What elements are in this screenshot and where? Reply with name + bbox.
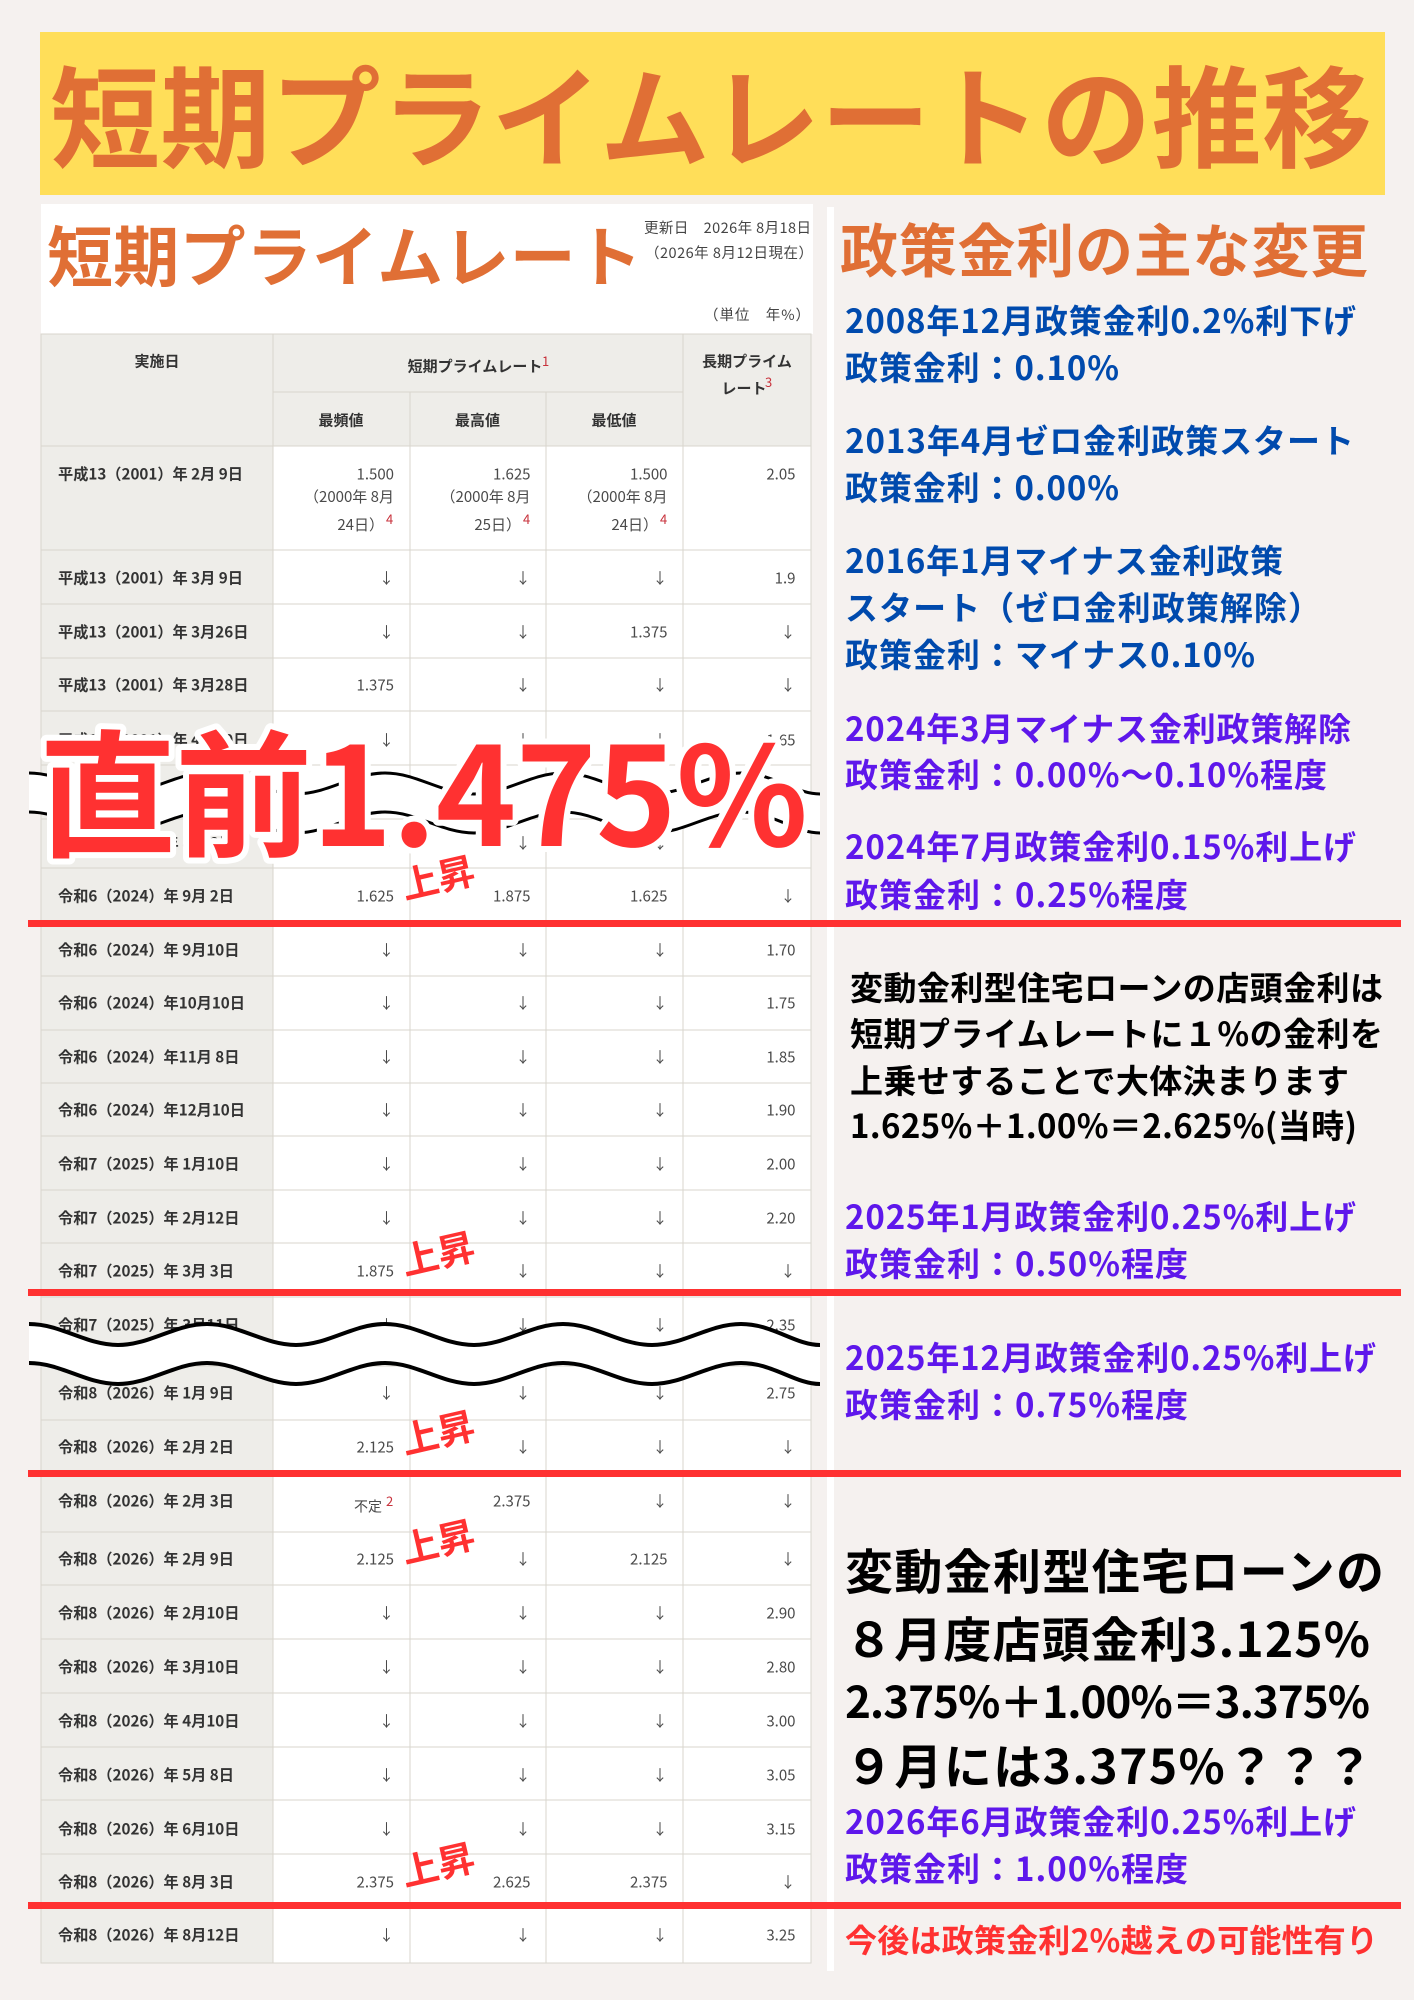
row 2026-03-10: ↓: [379, 1656, 394, 1678]
row 2025-01-10: ↓: [515, 1154, 530, 1174]
row 2026-08-03: 2.375: [357, 1872, 394, 1892]
outlook note: 今後は政策金利2%越えの可能性有り: [845, 1916, 1378, 1962]
highlight: August store rate: ９月には3.375%？？？: [845, 1728, 1373, 1798]
row 2025-03-03: ↓: [515, 1260, 530, 1282]
row 2025-01-10: ↓: [652, 1154, 668, 1174]
row 2026-02-09: 2.125: [357, 1548, 394, 1570]
policy change: 2026 June: 政策金利：1.00%程度: [845, 1843, 1188, 1891]
row 2026-04-10: ↓: [379, 1710, 394, 1732]
explanation: store rate rule: [850, 962, 1383, 1148]
row 2024-08: ↓: [515, 832, 530, 854]
row 2025-01-10: 令和7（2025）年 1月10日: [58, 1152, 239, 1174]
row 2025-02-12: 2.20: [766, 1208, 796, 1228]
row 2026-02-09: ↓: [780, 1548, 796, 1570]
policy change: 2026 June: 2026年6月政策金利0.25%利上げ: [845, 1796, 1356, 1844]
rise labels: 上昇: [395, 1396, 480, 1465]
row 2026-02-03: [58, 1490, 796, 1516]
row 2001-02-09: 2.05: [766, 464, 796, 484]
row 2026-02-10: [58, 1602, 796, 1624]
row 2026-02-03: 令和8（2026）年 2月 3日: [58, 1490, 234, 1512]
table header: 3: [765, 372, 772, 391]
row 2025-03-11: 令和7（2025）年 3月11日: [58, 1314, 239, 1336]
table header: 長期プライム: [702, 350, 792, 372]
policy change: 2016: 2016年1月マイナス金利政策: [845, 535, 1283, 583]
explanation: store rate rule: 上乗せすることで大体決まります: [850, 1055, 1349, 1103]
row 2026-01-09: ↓: [652, 1382, 668, 1404]
row 2026-01-09: 2.75: [766, 1382, 796, 1404]
row 2025-01-10: 2.00: [766, 1154, 796, 1174]
policy change: 2016: 政策金利：マイナス0.10%: [845, 629, 1255, 677]
row 2025-03-03: 令和7（2025）年 3月 3日: [58, 1260, 234, 1282]
row 2001-03-26: ↓: [379, 622, 394, 642]
row 2026-08-12: [58, 1924, 796, 1946]
row 2001-03-26: [58, 620, 796, 642]
policy change: 2024 March: [845, 703, 1351, 797]
row 2026-04-10: ↓: [515, 1710, 530, 1732]
row 2024-10-10: ↓: [652, 992, 668, 1014]
row 2001-04: [58, 728, 796, 750]
row 2026-03-10: ↓: [515, 1656, 530, 1678]
row 2024-11-08: ↓: [515, 1046, 530, 1068]
row 2024-12-10: ↓: [379, 1100, 394, 1120]
wave break: lower: [29, 1324, 820, 1384]
policy change: 2013: 2013年4月ゼロ金利政策スタート: [845, 415, 1354, 463]
row 2024-10-10: ↓: [379, 992, 394, 1014]
row 2026-06-10: ↓: [652, 1818, 668, 1840]
policy change: 2025 January: 政策金利：0.50%程度: [845, 1238, 1188, 1286]
policy change: 2013: 政策金利：0.00%: [845, 462, 1119, 510]
row 2026-05-08: ↓: [652, 1764, 668, 1786]
policy change: 2024 March: 政策金利：0.00%～0.10%程度: [845, 749, 1327, 797]
table background: [41, 334, 811, 1963]
row 2026-02-03: ↓: [652, 1490, 668, 1512]
row 2001-02-09: （2000年 8月: [304, 486, 394, 507]
row 2001-02-09: 24日）: [337, 514, 384, 535]
row 2001-03-26: 1.375: [630, 622, 668, 642]
row 2025-03-11: ↓: [379, 1314, 394, 1336]
row 2024-12-10: ↓: [652, 1100, 668, 1120]
rise labels: 上昇: [395, 1828, 480, 1897]
row 2026-02-10: 2.90: [766, 1602, 796, 1624]
row 2024-09-10: 令和6（2024）年 9月10日: [58, 938, 239, 960]
row 2024-11-08: ↓: [379, 1046, 394, 1068]
row 2001-03-09: [58, 566, 796, 588]
row 2026-03-10: 令和8（2026）年 3月10日: [58, 1656, 239, 1678]
row 2001-02-09: 1.500: [357, 464, 394, 484]
table header: [134, 350, 792, 430]
row 2024-08: ↓: [652, 832, 668, 854]
policy change: 2026 June: [845, 1796, 1356, 1891]
row 2001-03-28: ↓: [652, 674, 668, 696]
explanation: store rate rule: 短期プライムレートに１%の金利を: [850, 1008, 1383, 1056]
row 2024-09-10: ↓: [515, 940, 530, 960]
row 2026-06-10: [58, 1818, 796, 1840]
row 2026-08-12: ↓: [515, 1924, 530, 1946]
row 2026-01-09: 令和8（2026）年 1月 9日: [58, 1382, 234, 1404]
policy change: 2008: [845, 295, 1356, 390]
row 2026-05-08: 3.05: [766, 1764, 796, 1786]
row 2001-03-09: 平成13（2001）年 3月 9日: [58, 566, 243, 588]
callout: previous rate 1.475%: 直前1.475%: [39, 688, 808, 886]
row 2026-08-03: 2.625: [493, 1872, 530, 1892]
highlight: August store rate: ８月度店頭金利3.125%: [845, 1601, 1370, 1671]
row 2025-03-11: [58, 1314, 796, 1336]
policy change: 2025 January: [845, 1191, 1356, 1286]
policy change: 2008: 政策金利：0.10%: [845, 342, 1119, 390]
title banner: 短期プライムレートの推移: [50, 31, 1372, 191]
row 2025-03-03: 1.875: [357, 1260, 394, 1282]
vertical white divider: [827, 207, 834, 1971]
row 2024-09-10: [58, 938, 796, 960]
row 2026-08-03: 2.375: [630, 1872, 668, 1892]
row 2024-09-02: [58, 884, 796, 906]
highlight: August store rate: 変動金利型住宅ローンの: [845, 1533, 1384, 1603]
row 2001-02-09: 1.625: [493, 464, 530, 484]
row 2001-02-09: 1.500: [630, 464, 668, 484]
row 2001-03-26: ↓: [780, 622, 796, 642]
row 2026-04-10: ↓: [652, 1710, 668, 1732]
policy change: 2008: 2008年12月政策金利0.2%利下げ: [845, 295, 1356, 343]
red divider lines: [28, 920, 1401, 1909]
row 2024-09-10: ↓: [652, 940, 668, 960]
row 2024-11-08: [58, 1046, 796, 1068]
row 2025-03-03: ↓: [652, 1260, 668, 1282]
table header: 最頻値: [318, 410, 364, 430]
row 2024-11-08: 令和6（2024）年11月 8日: [58, 1046, 239, 1068]
update date note: 更新日 2026年 8月18日: [644, 217, 811, 238]
row 2026-08-12: ↓: [652, 1924, 668, 1946]
row 2001-03-26: ↓: [515, 622, 530, 642]
highlight: August store rate: [845, 1533, 1384, 1798]
policy change: 2024 July: 政策金利：0.25%程度: [845, 869, 1188, 917]
row 2001-02-09: 平成13（2001）年 2月 9日: [58, 462, 243, 484]
row 2026-02-09: 2.125: [630, 1548, 668, 1570]
row 2026-06-10: 令和8（2026）年 6月10日: [58, 1818, 239, 1840]
row 2026-08-03: ↓: [780, 1872, 796, 1892]
panel: short-term prime rate table: [41, 204, 813, 1963]
row 2026-08-12: 令和8（2026）年 8月12日: [58, 1924, 239, 1946]
row 2001-03-09: ↓: [652, 568, 668, 588]
row 2026-02-09: ↓: [515, 1548, 530, 1570]
row 2025-03-11: ↓: [515, 1314, 530, 1336]
row 2001-02-09: （2000年 8月: [440, 486, 530, 507]
row 2001-03-09: ↓: [379, 568, 394, 588]
row 2026-08-12: 3.25: [766, 1924, 796, 1946]
row 2026-05-08: ↓: [379, 1764, 394, 1786]
row 2026-08-12: ↓: [379, 1924, 394, 1946]
row 2001-04: 平成13（2001）年 4月10日: [58, 728, 248, 750]
row 2024-12-10: 令和6（2024）年12月10日: [58, 1098, 245, 1120]
row 2024-12-10: [58, 1098, 796, 1120]
row 2001-02-09: 4: [660, 509, 667, 528]
row 2001-03-28: 平成13（2001）年 3月28日: [58, 674, 248, 696]
highlight: August store rate: 2.375%＋1.00%＝3.375%: [845, 1667, 1370, 1731]
row 2001-04: ↓: [652, 730, 668, 750]
explanation: store rate rule: 1.625%＋1.00%＝2.625%(当時): [850, 1100, 1357, 1148]
row 2024-09-02: 1.625: [357, 886, 394, 906]
row 2001-03-26: 平成13（2001）年 3月26日: [58, 620, 248, 642]
policy change: 2024 July: [845, 821, 1356, 917]
row 2001-03-28: 1.375: [357, 674, 394, 696]
row 2026-02-02: 2.125: [357, 1436, 394, 1458]
row 2026-02-10: ↓: [652, 1602, 668, 1624]
policy change: 2024 March: 2024年3月マイナス金利政策解除: [845, 703, 1351, 751]
row 2024-09-02: 1.875: [493, 886, 530, 906]
policy change: 2016: スタート（ゼロ金利政策解除）: [845, 582, 1321, 630]
row 2024-11-08: ↓: [652, 1046, 668, 1068]
row 2026-08-03: [58, 1870, 796, 1892]
row 2025-02-12: ↓: [515, 1208, 530, 1228]
update date note: （2026年 8月12日現在）: [645, 242, 813, 263]
row 2026-01-09: ↓: [379, 1382, 394, 1404]
row 2024-08: 令和6（2024）年 8月 8日: [58, 832, 234, 854]
table grid: [41, 334, 811, 1963]
policy change: 2025 December: 2025年12月政策金利0.25%利上げ: [845, 1332, 1376, 1380]
row 2026-01-09: ↓: [515, 1382, 530, 1404]
row 2026-02-02: 令和8（2026）年 2月 2日: [58, 1436, 234, 1458]
policy change: 2025 December: 政策金利：0.75%程度: [845, 1379, 1188, 1427]
right column heading: 政策金利の主な変更: [840, 205, 1368, 289]
row 2001-02-09: 24日）: [611, 514, 658, 535]
row 2001-02-09: 25日）: [474, 514, 521, 535]
panel heading: 短期プライムレート: [47, 205, 642, 301]
rise labels: [395, 841, 480, 1897]
table header: 最高値: [455, 410, 500, 430]
row 2025-01-10: [58, 1152, 796, 1174]
update date note: （単位 年%）: [704, 304, 810, 325]
row 2024-10-10: [58, 992, 796, 1014]
row 2024-08: ↓: [379, 832, 394, 854]
row 2025-03-11: 2.35: [766, 1314, 796, 1336]
row 2026-02-03: 2: [386, 1491, 393, 1510]
row 2026-04-10: [58, 1710, 796, 1732]
row 2026-03-10: ↓: [652, 1656, 668, 1678]
row 2001-03-28: ↓: [780, 674, 796, 696]
row 2026-02-09: [58, 1548, 796, 1570]
policy change: 2025 January: 2025年1月政策金利0.25%利上げ: [845, 1191, 1356, 1239]
row 2026-03-10: [58, 1656, 796, 1678]
row 2026-01-09: [58, 1382, 796, 1404]
row 2026-02-10: ↓: [515, 1602, 530, 1624]
row 2026-08-03: 令和8（2026）年 8月 3日: [58, 1870, 234, 1892]
row 2001-03-28: [58, 674, 796, 696]
row 2026-06-10: ↓: [379, 1818, 394, 1840]
row 2024-09-02: 1.625: [630, 886, 668, 906]
rise labels: 上昇: [395, 841, 480, 910]
row 2024-12-10: 1.90: [766, 1100, 796, 1120]
row 2026-02-10: 令和8（2026）年 2月10日: [58, 1602, 239, 1624]
row 2026-04-10: 令和8（2026）年 4月10日: [58, 1710, 239, 1732]
row 2025-03-11: ↓: [652, 1314, 668, 1336]
row 2026-05-08: ↓: [515, 1764, 530, 1786]
row 2001-03-28: ↓: [515, 674, 530, 696]
update date note: [644, 217, 813, 325]
rise labels: 上昇: [395, 1505, 480, 1574]
row 2024-09-02: 令和6（2024）年 9月 2日: [58, 884, 234, 906]
row 2001-04: ↓: [515, 730, 530, 750]
row 2024-12-10: ↓: [515, 1100, 530, 1120]
policy change: 2016: [845, 535, 1321, 677]
row 2024-09-10: 1.70: [766, 940, 796, 960]
policy change: 2025 December: [845, 1332, 1376, 1427]
row 2026-02-09: 令和8（2026）年 2月 9日: [58, 1548, 234, 1570]
row 2024-10-10: 令和6（2024）年10月10日: [58, 992, 245, 1014]
row 2026-02-02: [58, 1436, 796, 1458]
table header: 短期プライムレート: [408, 356, 542, 376]
row 2025-02-12: ↓: [379, 1208, 394, 1228]
row 2001-02-09: 4: [523, 509, 530, 528]
explanation: store rate rule: 変動金利型住宅ローンの店頭金利は: [850, 962, 1383, 1010]
policy change: 2024 July: 2024年7月政策金利0.15%利上げ: [845, 821, 1356, 869]
row 2001-03-09: 1.9: [775, 568, 796, 588]
row 2025-03-03: ↓: [780, 1260, 796, 1282]
row 2025-01-10: ↓: [379, 1154, 394, 1174]
table header: 実施日: [134, 350, 180, 372]
wave break: upper: [29, 773, 820, 833]
row 2024-10-10: 1.75: [766, 992, 796, 1014]
row 2026-02-10: ↓: [379, 1602, 394, 1624]
row 2024-08: ↓: [780, 832, 796, 854]
row 2026-02-02: ↓: [780, 1436, 796, 1458]
row 2001-02-09: [58, 462, 796, 535]
row 2026-06-10: 3.15: [766, 1818, 796, 1840]
row 2024-09-10: ↓: [379, 940, 394, 960]
row 2001-02-09: 4: [386, 509, 393, 528]
row 2026-04-10: 3.00: [766, 1710, 796, 1732]
row 2024-08: [58, 832, 796, 854]
row 2024-11-08: 1.85: [766, 1046, 796, 1068]
rise labels: 上昇: [395, 1217, 480, 1286]
table header: 最低値: [591, 410, 637, 430]
row 2024-09-02: ↓: [780, 886, 796, 906]
row 2001-02-09: （2000年 8月: [578, 486, 668, 507]
row 2026-02-03: 不定: [354, 1496, 382, 1516]
row 2026-05-08: [58, 1764, 796, 1786]
row 2026-03-10: 2.80: [766, 1656, 796, 1678]
row 2024-10-10: ↓: [515, 992, 530, 1014]
table header: レート: [721, 378, 767, 398]
table header: 1: [542, 351, 549, 370]
row 2001-04: ↓: [379, 730, 394, 750]
row 2025-03-03: [58, 1260, 796, 1282]
row 2026-02-02: ↓: [515, 1436, 530, 1458]
row 2026-02-03: ↓: [780, 1490, 796, 1512]
row 2001-04: 1.65: [766, 730, 796, 750]
row 2026-06-10: ↓: [515, 1818, 530, 1840]
row 2001-03-09: ↓: [515, 568, 530, 588]
row 2026-05-08: 令和8（2026）年 5月 8日: [58, 1764, 234, 1786]
policy change: 2013: [845, 415, 1354, 510]
row 2025-02-12: [58, 1206, 796, 1228]
row 2025-02-12: ↓: [652, 1208, 668, 1228]
row 2026-02-03: 2.375: [493, 1490, 530, 1512]
row 2026-02-02: ↓: [652, 1436, 668, 1458]
row 2025-02-12: 令和7（2025）年 2月12日: [58, 1206, 239, 1228]
